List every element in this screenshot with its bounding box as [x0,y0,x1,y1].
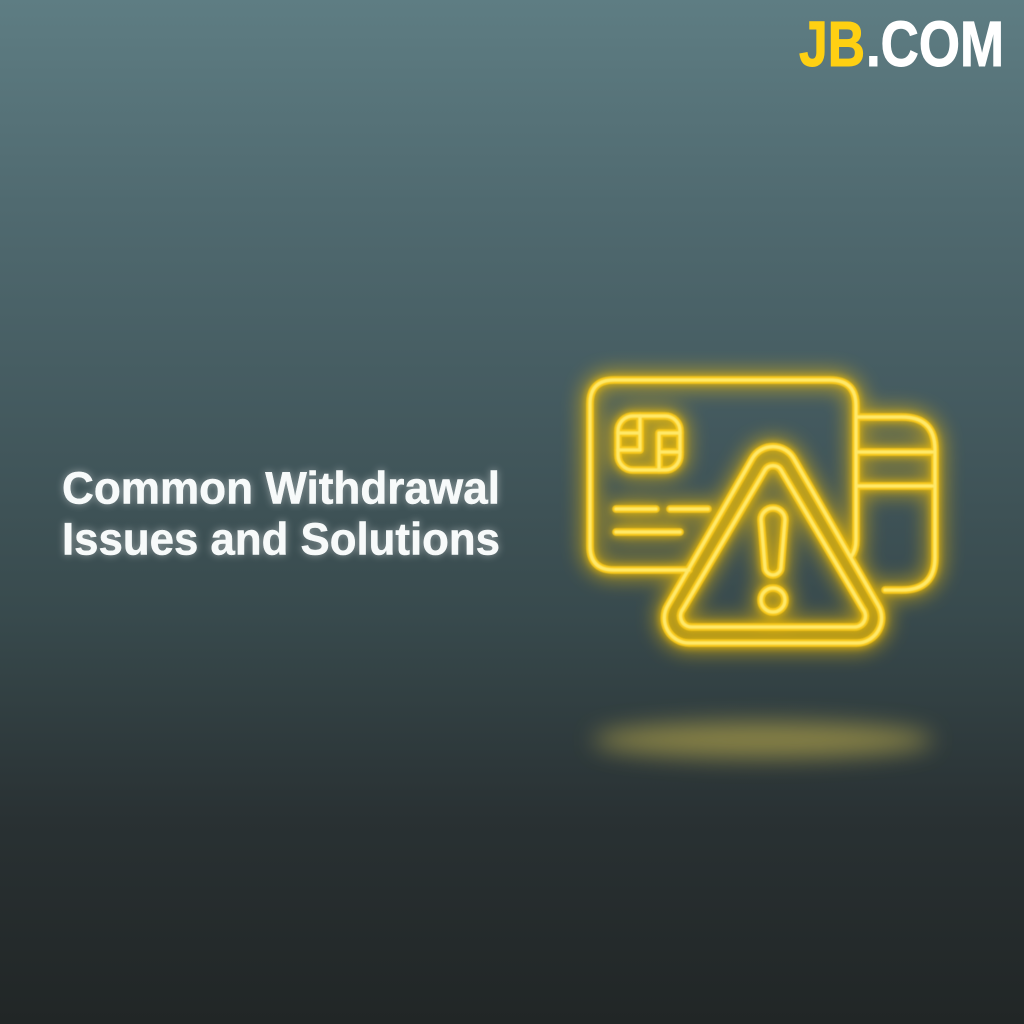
title text: Common Withdrawal [62,462,500,514]
glow reflection below icon [593,722,933,758]
title glow: Issues and Solutions [62,514,500,564]
icon: neon credit card with warning triangle [590,380,935,643]
title text: Issues and Solutions [62,514,500,564]
title [62,462,500,564]
title glow: Common Withdrawal [62,462,500,514]
logo: JB.COM: JB [799,8,865,80]
title text [62,462,500,564]
logo: JB.COM [799,8,1004,80]
title glow [62,462,500,564]
